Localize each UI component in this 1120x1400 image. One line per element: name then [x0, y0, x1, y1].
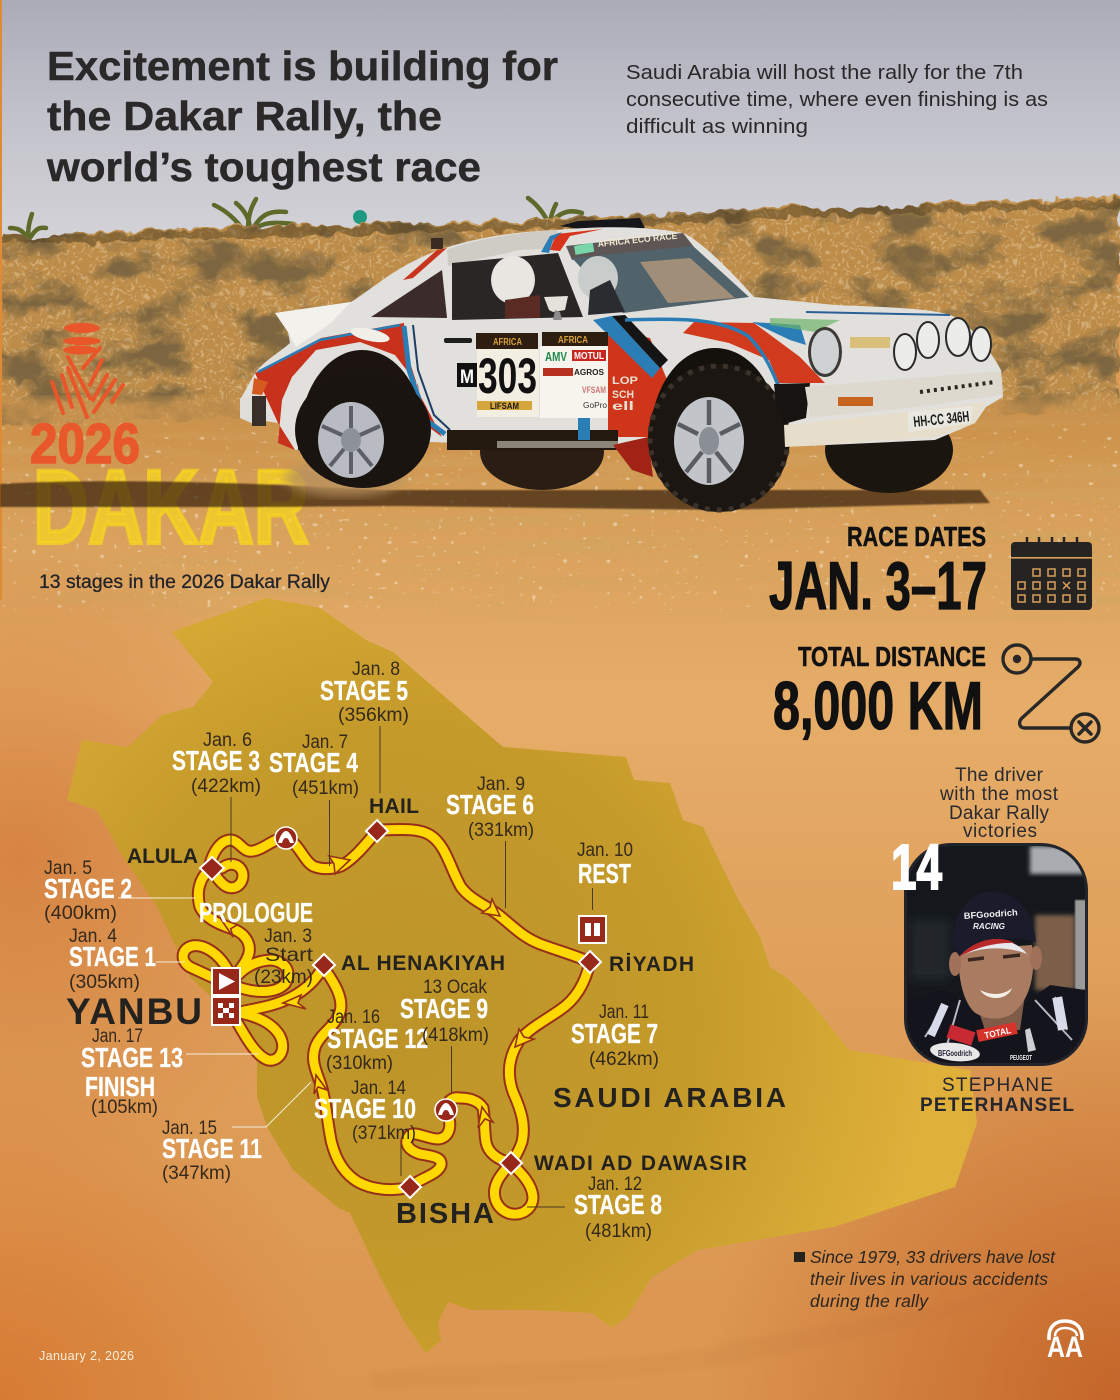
hill base blend [0, 398, 1120, 428]
rally car: GoPro [583, 401, 608, 410]
rear stripes [404, 326, 445, 434]
rally car: AFRICA ECO RACE [597, 231, 678, 249]
race number: 303 [478, 348, 537, 404]
headlight [808, 327, 842, 377]
value: JAN. 3–17 [769, 548, 987, 624]
arrow: stage 2 [216, 919, 237, 937]
rally car: M [460, 367, 474, 388]
waypoint markers [200, 820, 606, 1198]
sponsor strip [477, 401, 532, 410]
leader lines [118, 726, 592, 1207]
marker: Bisha [399, 1176, 421, 1198]
hood sticker [850, 337, 890, 348]
label: stage 6: STAGE 6 [446, 789, 534, 820]
front fender red [683, 322, 825, 383]
roof rack [560, 218, 645, 232]
label: stage 4: (451km) [292, 778, 359, 799]
label: stage 13: STAGE 13 [81, 1042, 183, 1073]
footnote [794, 1247, 1056, 1311]
rear camera [431, 238, 443, 249]
label: rest day [577, 840, 633, 889]
side lettering: LOP [612, 375, 638, 387]
label: stage 5: Jan. 8 [352, 659, 400, 680]
orange wash left [0, 560, 600, 1200]
body shell [240, 227, 1003, 450]
rally car: VFSAM [582, 385, 606, 395]
label: stage 9: STAGE 9 [400, 993, 488, 1024]
sand pebbles [0, 420, 1120, 610]
door decal number panel [477, 349, 539, 417]
sky [0, 0, 1120, 260]
label: stage 3 [172, 730, 261, 797]
label: stage 1 [69, 926, 156, 993]
label: stage 6: Jan. 9 [477, 774, 525, 795]
label: stage 7: Jan. 11 [599, 1002, 649, 1023]
arrow: stage 12 [283, 995, 306, 1009]
map: Saudi Arabia [67, 598, 977, 1353]
rally car: AFRICA [558, 335, 588, 346]
whale tail [275, 302, 351, 347]
label: stage 13: (105km) [91, 1097, 158, 1118]
Dakar 2026 logo [30, 323, 309, 566]
rear fender red [255, 323, 442, 450]
neck [980, 1000, 1024, 1030]
label: stage 13 [81, 1026, 183, 1118]
windshield banner [566, 233, 694, 260]
marker: Wadi ad Dawasir [500, 1152, 522, 1174]
label: stage 4: STAGE 4 [269, 747, 358, 778]
rally car: AFRICA [493, 337, 522, 348]
bumper holes [920, 382, 995, 392]
driver name: STEPHANE [942, 1075, 1053, 1096]
driver caption: Dakar Rally [949, 803, 1050, 824]
label: stage 9 [400, 977, 489, 1046]
door handle [444, 338, 472, 343]
label: stage 9: 13 Ocak [423, 977, 487, 998]
victories count: 14: 14 [891, 831, 942, 903]
label: stage 7: (462km) [589, 1049, 659, 1070]
logo: Anadolu Agency [1047, 1321, 1083, 1364]
label: stage 12: Jan. 16 [327, 1007, 380, 1028]
label: stage 7: STAGE 7 [571, 1018, 658, 1049]
label: stage 2: Jan. 5 [44, 858, 92, 879]
label: stage 6 [446, 774, 534, 841]
place: Yanbu: YANBU [66, 991, 202, 1032]
cap logo: BFGoodrich [963, 907, 1018, 921]
rally car: AMV [545, 349, 567, 364]
M plate [457, 363, 477, 387]
roof shade [447, 230, 563, 266]
title: world’s toughest race [46, 144, 481, 190]
arrow: stage 11 [314, 1075, 327, 1094]
door decal sponsors panel [540, 346, 608, 418]
front fender panel [650, 320, 826, 390]
label: stage 7 [571, 1002, 659, 1070]
ground shadow streak [0, 481, 990, 510]
marker: Hail [366, 820, 388, 842]
label: stage 13: FINISH [85, 1071, 155, 1102]
grass tips [0, 470, 320, 494]
label: stage 5: STAGE 5 [320, 675, 408, 706]
windows [452, 253, 583, 320]
label: rest day: REST [578, 858, 631, 889]
label: stage 12: STAGE 12 [327, 1023, 428, 1054]
value: 8,000 KM [773, 668, 983, 744]
driver name [920, 1075, 1074, 1116]
rocker panel [447, 430, 618, 450]
bumper [805, 371, 1003, 418]
label: stage 13: Jan. 17 [92, 1026, 143, 1047]
route: stages path [183, 829, 590, 1214]
icon: camp 2 [435, 1099, 457, 1121]
taillight [252, 378, 268, 395]
place: Al Henakiyah: AL HENAKIYAH [341, 952, 505, 975]
label: stage 8: Jan. 12 [588, 1174, 642, 1195]
bullet [794, 1252, 805, 1262]
label: prologue [199, 897, 314, 988]
note text [810, 1247, 1056, 1311]
hillside [0, 190, 1120, 430]
drivers [491, 256, 535, 304]
rear sponsor oval [349, 325, 391, 345]
icon: calendar [1011, 537, 1092, 610]
label: stage 5: (356km) [338, 705, 409, 726]
sand ground [0, 400, 1120, 1400]
icon: rest square [579, 916, 606, 943]
hood stripes [625, 319, 778, 385]
faint dust trail [370, 1290, 1006, 1390]
label: stage 2: (400km) [44, 903, 117, 924]
label: stage 2: STAGE 2 [44, 873, 132, 904]
note text: their lives in various accidents [810, 1269, 1048, 1289]
label: stage 3: (422km) [191, 776, 261, 797]
rear bumper [240, 395, 256, 425]
driver caption: victories [963, 821, 1037, 842]
label: stage 11: (347km) [162, 1163, 231, 1184]
label: stage 9: (418km) [422, 1025, 489, 1046]
place: Hail: HAIL [369, 795, 419, 818]
driver photo [904, 843, 1090, 1066]
windshield [572, 246, 749, 313]
label: stage 3: Jan. 6 [203, 730, 252, 751]
map heading: 13 stages in the 2026 Dakar Rally [39, 572, 331, 593]
race dates stat [769, 521, 987, 624]
photo background [907, 846, 1085, 1004]
arrow: stage 9 [478, 1107, 493, 1128]
title [46, 43, 558, 190]
marker: Riyadh [579, 951, 601, 973]
subtitle: Saudi Arabia will host the rally for the 7th [626, 61, 1023, 84]
marker: Al Henakiyah [313, 954, 335, 976]
mirror [544, 296, 568, 312]
place: Wadi ad Dawasir: WADI AD DAWASIR [534, 1152, 747, 1175]
black front panel [774, 383, 810, 424]
label: stage 12 [326, 1007, 428, 1074]
red panel and door stripes [608, 330, 668, 437]
label: stage 5 [320, 659, 409, 726]
label: stage 1: STAGE 1 [69, 941, 156, 972]
label: stage 8: STAGE 8 [574, 1189, 662, 1220]
title: the Dakar Rally, the [47, 93, 442, 139]
label: stage 8 [574, 1174, 662, 1242]
driver photo: RACING [973, 922, 1005, 931]
face [958, 945, 1033, 1019]
driver photo: BFGoodrich [938, 1049, 972, 1058]
wordmark: DAKAR [33, 449, 309, 566]
total distance stat [773, 641, 986, 744]
label: stage 12: (310km) [326, 1053, 393, 1074]
marker: AlUla [200, 857, 224, 880]
far wheels [825, 407, 953, 493]
eyes and mouth [968, 955, 1020, 960]
subtitle [626, 61, 1048, 138]
teal ball [353, 210, 367, 224]
valance [784, 402, 985, 447]
label: stage 1: (305km) [69, 972, 140, 993]
icon: touareg head [52, 323, 123, 417]
front wheel [648, 364, 790, 512]
note text: Since 1979, 33 drivers have lost [810, 1247, 1056, 1267]
driver caption [939, 765, 1059, 842]
cap [953, 891, 1036, 957]
driver name: PETERHANSEL [920, 1095, 1074, 1116]
date: January 2, 2026 [39, 1349, 134, 1363]
label: prologue: PROLOGUE [199, 897, 313, 928]
label: rest day: Jan. 10 [577, 840, 633, 861]
driver caption: with the most [939, 784, 1059, 805]
sand ripples [0, 420, 1120, 620]
label: RACE DATES [847, 521, 986, 552]
label: stage 11: STAGE 11 [162, 1133, 262, 1164]
place: Bisha: BISHA [396, 1198, 494, 1230]
arrow: stage 4 [329, 856, 350, 874]
label: prologue: (23km) [254, 967, 313, 988]
year: 2026 [30, 412, 140, 476]
label: stage 10: Jan. 14 [351, 1078, 406, 1099]
rally car: ell [612, 399, 634, 413]
title: Excitement is building for [47, 43, 558, 89]
label: stage 11: Jan. 15 [162, 1118, 217, 1139]
rear wheel [295, 372, 431, 488]
icon: start square [212, 968, 240, 995]
label: stage 1: Jan. 4 [69, 926, 117, 947]
label: stage 10 [314, 1078, 416, 1144]
label: stage 4 [269, 732, 359, 799]
subtitle: difficult as winning [626, 115, 808, 138]
dust cloud [285, 460, 405, 496]
place: AlUla: ALULA [127, 845, 198, 868]
orange wash bottom left [0, 1040, 360, 1400]
roof stripes [550, 229, 603, 251]
driver photo: TOTAL [983, 1025, 1012, 1041]
label: stage 8: (481km) [585, 1221, 652, 1242]
door decal header 2 [542, 332, 608, 346]
palm plants [10, 198, 582, 238]
suit [1039, 985, 1085, 994]
label: stage 11 [162, 1118, 262, 1184]
icon: finish square [212, 997, 240, 1025]
arrow: stage 6 [482, 899, 500, 916]
country label: SAUDI ARABIA [553, 1082, 786, 1113]
rally car: MOTUL [574, 351, 604, 362]
rear wheel arch [298, 350, 426, 450]
label: TOTAL DISTANCE [798, 641, 986, 672]
spot lights [894, 334, 916, 370]
left edge line [0, 0, 2, 600]
driver caption: The driver [955, 765, 1044, 786]
icon: route [1003, 645, 1099, 742]
label: stage 6: (331km) [468, 820, 534, 841]
label: stage 3: STAGE 3 [172, 745, 260, 776]
front wheel arch [649, 348, 781, 450]
arrow: stage 7 [515, 1029, 534, 1047]
rally car: AGROS [574, 368, 605, 377]
subtitle: consecutive time, where even finishing is as [626, 88, 1048, 111]
indicator [838, 397, 873, 406]
label: prologue: Jan. 3 [264, 926, 312, 947]
label: stage 2 [44, 858, 132, 924]
label: stage 10: (371km) [352, 1123, 416, 1144]
label: prologue: Start [265, 945, 314, 966]
mud flap [613, 437, 653, 477]
icon: camp 1 [275, 827, 297, 849]
place: Riyadh: RİYADH [609, 953, 694, 976]
rally car: HH-CC 346H [913, 408, 970, 431]
rally car [240, 218, 1003, 512]
orange wash bottom right [640, 960, 1120, 1400]
label: stage 10: STAGE 10 [314, 1093, 416, 1124]
logo: Anadolu Agency: AA [1047, 1331, 1083, 1364]
rally car: LIFSAM [490, 401, 519, 411]
dark band [0, 481, 990, 510]
rally car: SCH [612, 389, 634, 401]
sponsor badges [976, 1022, 1018, 1042]
driver photo: PEUGEOT [1010, 1055, 1032, 1062]
door decal header 1 [476, 333, 538, 349]
label: stage 4: Jan. 7 [302, 732, 348, 753]
licence plate [908, 406, 973, 432]
place names [66, 795, 786, 1230]
note text: during the rally [810, 1291, 929, 1311]
